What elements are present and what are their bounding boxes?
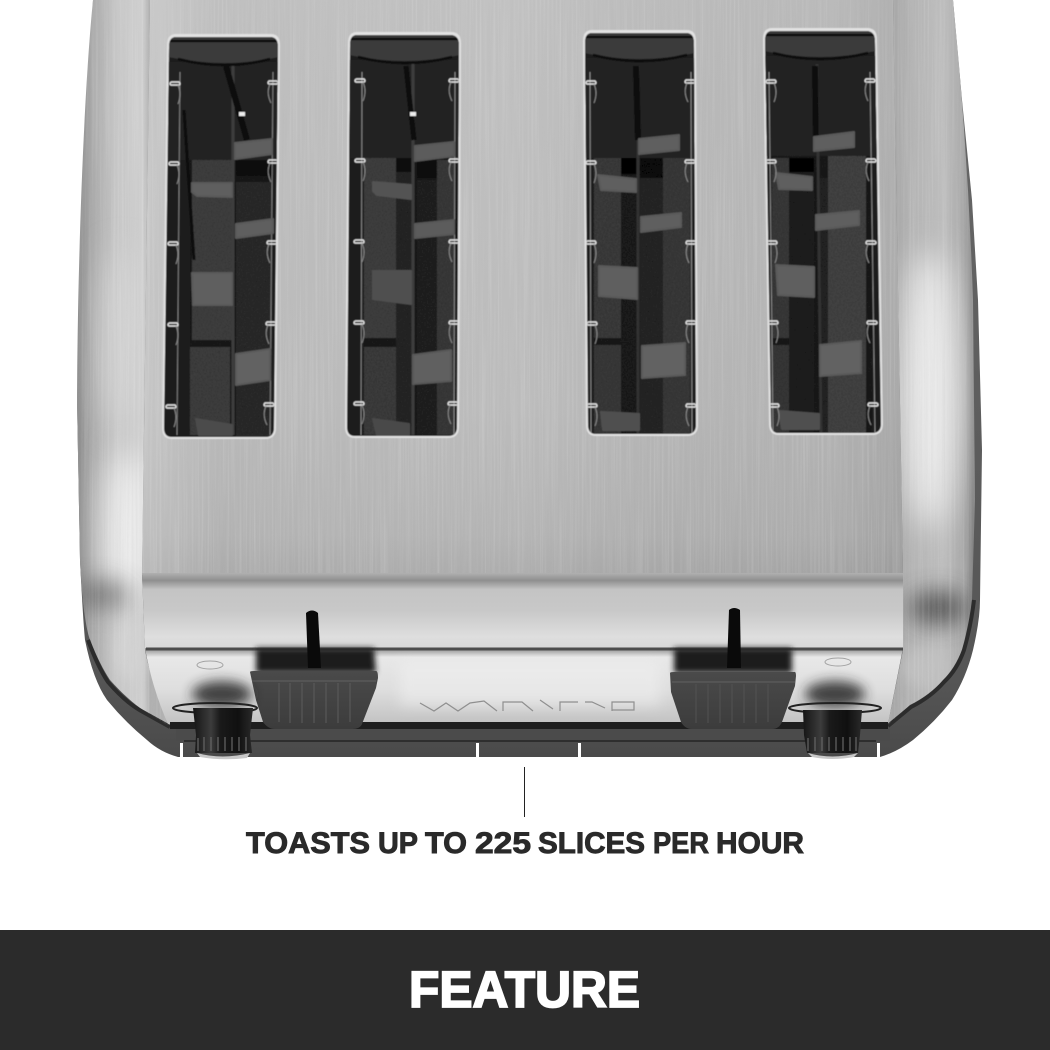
wire hooks [166, 81, 278, 427]
bottom plate edge [170, 722, 888, 729]
tabs [776, 132, 861, 429]
top shelf [764, 31, 876, 57]
right curved steel side [888, 0, 975, 724]
upper back wall [584, 58, 696, 158]
upper back wall [349, 60, 459, 158]
divider rod [817, 64, 821, 433]
toaster product photo [70, 0, 985, 759]
base lip [176, 729, 890, 741]
top shelf [168, 37, 279, 63]
slot 3 [580, 28, 702, 438]
right knob [789, 658, 881, 759]
divider rod [232, 66, 234, 435]
tabs [192, 139, 273, 435]
rounded lower fold band [142, 573, 903, 649]
right lever track [674, 608, 792, 673]
fold shadow line [146, 648, 903, 650]
brand emboss [420, 700, 634, 711]
callout text: UP [378, 827, 418, 860]
lower control plate [145, 648, 903, 724]
slot 1 [160, 33, 285, 443]
upper back wall [168, 62, 278, 160]
wire hooks [586, 80, 696, 426]
callout text: 225 [475, 827, 531, 860]
callout text: PER [653, 827, 709, 860]
back heating panels [190, 160, 272, 437]
foot notches [180, 743, 880, 758]
left lever [250, 671, 378, 729]
base shadow line [184, 740, 876, 742]
back heating panels [364, 158, 458, 435]
divider rod [636, 66, 640, 435]
slot 4 [760, 26, 886, 436]
dark plastic base shell [77, 0, 982, 757]
wire hooks [766, 79, 878, 426]
back heating panels [594, 158, 690, 435]
left lever track [256, 610, 376, 673]
top shelf [349, 35, 460, 61]
top shelf [584, 33, 695, 59]
front steel panel [142, 0, 903, 575]
callout text: TO [425, 827, 467, 860]
tabs [598, 135, 685, 430]
side rim shadow stripes [88, 600, 974, 727]
callout text [246, 827, 804, 860]
left curved steel side [77, 0, 170, 725]
slot 2 [340, 30, 465, 440]
back heating panels [772, 156, 872, 433]
callout text: TOASTS [246, 827, 370, 860]
callout leader line [524, 767, 525, 817]
plate soft reflection [400, 662, 660, 706]
footer heading: FEATURE [409, 961, 640, 1018]
tabs [373, 142, 454, 435]
wire hooks [354, 79, 459, 424]
footer band [0, 930, 1050, 1050]
brushed steel texture [76, 0, 976, 730]
upper back wall [764, 56, 878, 156]
left knob [173, 661, 257, 759]
callout text: SLICES [538, 827, 645, 860]
callout text: HOUR [716, 827, 804, 860]
right lever [670, 672, 796, 729]
divider rod [412, 64, 414, 435]
